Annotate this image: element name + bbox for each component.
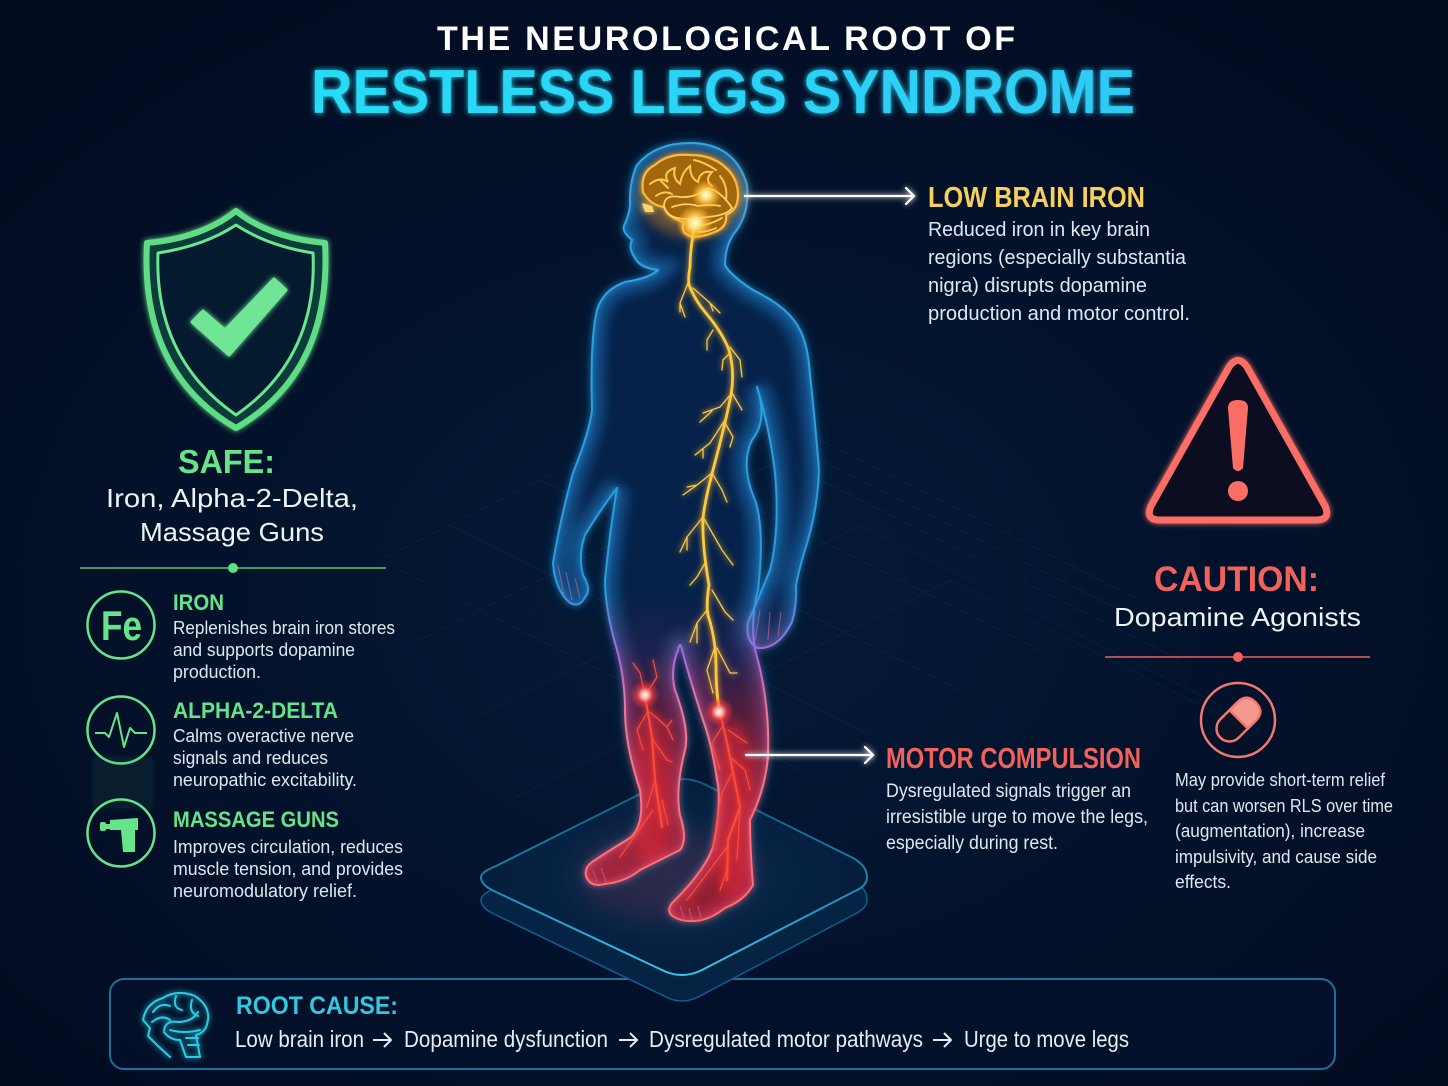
description: Reduced iron in key brain [928, 219, 1150, 241]
heading: LOW BRAIN IRON [928, 182, 1145, 214]
icon: pulse [88, 696, 154, 764]
safe subheading: Massage Guns [140, 517, 324, 547]
description: neuropathic excitability. [173, 770, 357, 790]
heading: ALPHA-2-DELTA [173, 698, 338, 723]
chain text: Low brain iron [235, 1026, 364, 1052]
arrow to brain [745, 188, 914, 204]
body outline [553, 143, 819, 921]
description: nigra) disrupts dopamine [928, 275, 1147, 297]
platform [481, 779, 867, 1001]
iron heading: IRON [173, 590, 224, 615]
root cause panel [110, 979, 1335, 1069]
safe heading: SAFE: [178, 443, 275, 480]
title line 1: THE NEUROLOGICAL ROOT OF [437, 20, 1015, 58]
description: Calms overactive nerve [173, 726, 354, 746]
hotspot right knee [704, 697, 734, 727]
description: neuromodulatory relief. [173, 881, 357, 901]
iron description: production. [173, 662, 261, 682]
faint artifact between icons [93, 757, 153, 808]
arrow to leg [746, 747, 873, 763]
iron description: Replenishes brain iron stores [173, 618, 395, 638]
body silhouette [553, 143, 819, 921]
icon: brain in head [143, 993, 208, 1057]
caution description: but can worsen RLS over time [1175, 796, 1393, 816]
brain folds [650, 160, 726, 200]
platform top layer [481, 779, 867, 975]
icon: pill [1201, 683, 1275, 757]
panel: safe [80, 211, 403, 901]
human figure [553, 143, 819, 921]
callout: motor compulsion [746, 743, 1148, 854]
red nerves [620, 660, 750, 900]
caution description: impulsivity, and cause side [1175, 847, 1377, 867]
icon: warning triangle [1149, 360, 1327, 520]
right leg branches [687, 727, 750, 900]
description [886, 781, 1148, 854]
description: signals and reduces [173, 748, 328, 768]
safe subheading: Iron, Alpha-2-Delta, [106, 483, 358, 513]
right leg nerve [720, 712, 740, 880]
iron hotspot 2 [677, 205, 713, 241]
iron description [173, 618, 395, 682]
temporal lobe [664, 188, 732, 232]
callout: low brain iron [745, 182, 1190, 325]
iron description: and supports dopamine [173, 640, 355, 660]
cerebrum [642, 155, 738, 237]
item: massage guns [88, 800, 403, 901]
chain arrows [373, 1033, 951, 1047]
safe divider [80, 563, 386, 573]
caution subheading: Dopamine Agonists [1114, 602, 1361, 632]
description: production and motor control. [928, 303, 1190, 325]
heading: MASSAGE GUNS [173, 807, 339, 832]
chain text: Dysregulated motor pathways [649, 1026, 923, 1052]
chain text: Urge to move legs [964, 1026, 1129, 1052]
caution heading: CAUTION: [1154, 560, 1319, 599]
icon: shield [147, 211, 325, 428]
heading: MOTOR COMPULSION [886, 743, 1141, 775]
platform lower layer [481, 801, 867, 1001]
root cause heading: ROOT CAUSE: [236, 992, 398, 1020]
safe subheading [106, 483, 358, 547]
title [311, 20, 1135, 127]
chain text: Dopamine dysfunction [404, 1026, 608, 1052]
iron hotspot 1 [691, 180, 721, 210]
nerve branches [680, 283, 742, 693]
description [928, 219, 1190, 325]
description: Dysregulated signals trigger an [886, 781, 1131, 802]
caution divider [1105, 652, 1370, 662]
caution description: (augmentation), increase [1175, 821, 1365, 841]
description: irresistible urge to move the legs, [886, 807, 1148, 828]
description: especially during rest. [886, 833, 1058, 854]
foot glow on platform [578, 830, 758, 920]
brain glow [638, 153, 746, 237]
yellow nerve [680, 223, 742, 708]
icon: Fe: Fe [101, 602, 142, 649]
description: Improves circulation, reduces [173, 837, 403, 857]
description [173, 726, 357, 790]
item: alpha-2-delta [88, 696, 357, 790]
frontal spot [642, 203, 654, 212]
hotspots [630, 180, 734, 727]
left leg nerve [645, 695, 662, 827]
hand and toe details [558, 565, 781, 920]
description: regions (especially substantia [928, 247, 1187, 269]
spinal nerve trunk [689, 223, 733, 708]
caution description: effects. [1175, 872, 1231, 892]
inner rim shading [553, 143, 819, 921]
icon: massage gun [88, 800, 154, 866]
description [173, 837, 403, 901]
panel: caution [1105, 360, 1393, 892]
title line 2: RESTLESS LEGS SYNDROME [311, 58, 1135, 127]
left leg branches [620, 660, 673, 857]
hotspot left knee [630, 680, 660, 710]
panel frame [110, 979, 1335, 1069]
icon: Fe [88, 592, 154, 658]
caution description [1175, 770, 1393, 892]
caution description: May provide short-term relief [1175, 770, 1386, 790]
description: muscle tension, and provides [173, 859, 403, 879]
chain text [235, 1026, 1129, 1052]
brain [638, 153, 746, 237]
item: iron [88, 590, 395, 682]
body outer glow [553, 143, 819, 921]
floor grid [380, 390, 1260, 800]
